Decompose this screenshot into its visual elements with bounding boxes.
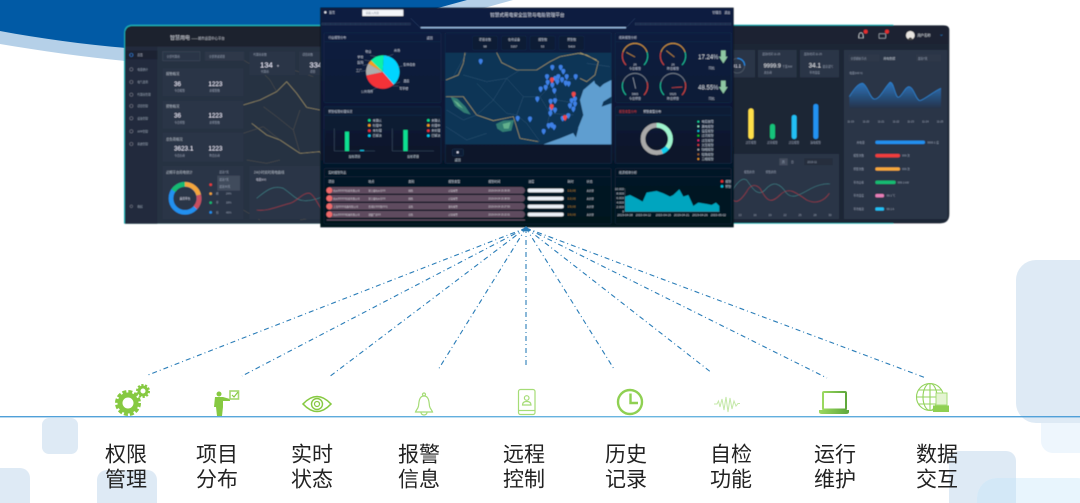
table header: 耗时: [568, 178, 574, 183]
table rows: 未处理: [587, 196, 594, 200]
left alarm overview cards: 总报警数: [209, 89, 220, 93]
map stat boxes: [472, 36, 584, 50]
label: 项目分布: 分布: [196, 468, 238, 492]
gauge 1: [622, 43, 648, 71]
percent down indicators: 48.55%: [698, 85, 719, 91]
left donut panel: 最近7天: [219, 178, 229, 182]
gauge 4: 昨日预警: [667, 95, 679, 100]
right side metrics panel: 99.1 ℃: [887, 194, 896, 198]
panel: alarm type donut: 报警类型分布: [619, 108, 637, 113]
panel: alarm type donut: [615, 107, 731, 163]
panel: industry alarm pie: 行业报警分布: [328, 35, 346, 40]
table header: [328, 178, 593, 183]
right top stat cards: 平均温度: [809, 70, 820, 74]
table rows: 杭州XXXXX科技有限公司: [333, 188, 360, 192]
donut legend: 电弧故障: [702, 119, 714, 124]
left donut panel: 最近7天: [219, 170, 229, 174]
left donut panel: 谷: [216, 210, 219, 214]
panel: alarm trend area chart: 能源规律分析: [619, 169, 637, 174]
table header: 报警类型: [448, 178, 460, 183]
left alarm overview cards: 报警概况: [166, 71, 180, 76]
map stat boxes: 项目总数: [479, 37, 491, 42]
left donut panel: 24%: [226, 192, 232, 196]
right bar chart: 过压报警: [746, 141, 757, 145]
left donut panel: 运营平台: [180, 196, 191, 200]
right top stat cards: 41.1: [733, 63, 742, 68]
panel: alarm trend area chart: 预警: [725, 183, 731, 188]
dashed connector lines: [148, 226, 926, 378]
panel: alarm trend area chart: 8,000: [617, 192, 624, 196]
left alarm overview cards: 3623.1: [174, 146, 194, 153]
table header: 状态: [587, 178, 593, 183]
right side metrics panel: 平均温度: [853, 194, 864, 198]
right side metrics panel: 999.1 kW: [898, 180, 909, 184]
right line chart panel: 周: [782, 160, 785, 164]
panel: alarm trend area chart: 2019-05-02: [711, 213, 726, 217]
panel: warning handling bars: 未确认: [373, 117, 382, 122]
map back button: 返回: [455, 157, 461, 162]
pie chart: [356, 47, 415, 94]
table rows: 诸暨厂房XX: [368, 212, 381, 216]
gauge 4: [660, 73, 686, 100]
label: 历史记录: 记录: [605, 468, 647, 492]
main header bar: 退出: [724, 10, 730, 15]
right side metrics panel: 11-23: [907, 120, 914, 124]
panel: alarm trend area chart: 4,000: [617, 201, 624, 205]
icon: sound wave: [714, 397, 740, 412]
table rows: 2019-04-04 15:39:05: [488, 190, 511, 192]
right side metrics panel: 999 次: [902, 154, 910, 158]
left sidebar: 电气监测: [137, 80, 148, 84]
gauge 2: 昨日报警: [667, 66, 679, 71]
right line chart panel: 22: [784, 213, 787, 217]
right line chart panel: 13: [739, 213, 742, 217]
left donut panel: 46%: [226, 210, 232, 214]
gauge 4: 9525: [670, 92, 677, 96]
left dropdown filters: 全部代理商: [167, 54, 180, 58]
label: 权限管理: 权限: [105, 444, 147, 466]
left donut panel: 峰: [216, 192, 219, 196]
panel: alarm trend area chart: [615, 168, 731, 224]
panel: alarm type donut: 预警类型分布: [643, 108, 661, 113]
left donut panel: 最近30天: [219, 185, 231, 189]
right side metrics panel: 用电量: [857, 140, 865, 144]
left stat cards top: 334: [309, 60, 323, 69]
panel: alarm trend area chart: 2019-04-16: [656, 213, 671, 217]
left sidebar: 收起: [137, 204, 143, 208]
baseline: [0, 416, 1080, 417]
icon: eye: [303, 396, 331, 412]
right bar chart: [746, 104, 821, 145]
panel: alarm trend area chart: 2019-04-26: [692, 213, 708, 217]
left alarm overview cards: 今日预警: [174, 121, 185, 125]
label: 远程控制: 控制: [503, 468, 545, 492]
panel: alarm trend area chart: 6,000: [617, 196, 624, 200]
right line chart panel: [727, 154, 839, 219]
table header: 进度: [528, 178, 534, 183]
map stat boxes: 报警数: [538, 37, 547, 42]
left sidebar: 项目管理: [137, 104, 148, 108]
left donut panel: 18%: [226, 201, 232, 205]
right line chart panel: 25: [799, 213, 802, 217]
right side metrics panel: 11-24: [922, 120, 929, 124]
left stat cards top: 项目: [310, 70, 316, 74]
right dashboard header: 用户名称: [917, 33, 931, 38]
left dashboard header: [125, 26, 333, 47]
gauge 3: 今日预警: [629, 95, 641, 100]
left dashboard map lines: [243, 53, 325, 220]
panel: alarm trend area chart: 报警: [725, 178, 731, 183]
right side metrics panel: 平均功率: [853, 180, 864, 184]
panel: warning handling bars: 未处理: [373, 128, 382, 133]
panel: alarm trend area chart: 2019-04-08: [617, 213, 633, 217]
left line chart panel: [249, 166, 329, 219]
table header: 地点: [368, 178, 374, 183]
label: 历史记录: 历史: [605, 444, 647, 466]
right side metrics panel: 预警次数: [853, 167, 864, 171]
panel: gauges: 能耗报警分析: [619, 34, 637, 39]
panel: alarm trend area chart: 2,000: [617, 205, 624, 209]
right side metrics panel: 99.1 A: [887, 207, 894, 211]
left sidebar: 首页: [137, 53, 143, 57]
right top stat cards: 千瓦/kW: [782, 65, 793, 69]
left alarm overview cards: 昨日负荷: [209, 154, 220, 158]
donut legend: 短路报警: [702, 151, 714, 156]
left line chart panel: 24小时实时用电曲线: [254, 169, 285, 174]
left alarm overview cards: 1223: [208, 81, 223, 88]
panel: warning handling bars: 当前项目: [348, 154, 360, 159]
table rows: 2019-04-04 15:38:53: [488, 198, 511, 200]
right top stat cards: 34.1: [809, 63, 821, 70]
table rows: 青浦区XXX路XX号: [368, 204, 388, 208]
right bar chart: 漏电报警: [810, 141, 821, 145]
right top stat cards: 9999.9: [764, 64, 781, 70]
pie chart: 学校: [357, 54, 363, 59]
left alarm overview cards: 1223: [208, 113, 223, 120]
label: 权限管理: 管理: [105, 468, 147, 492]
gauge 3: 3865: [632, 92, 639, 96]
left alarm overview cards: 预警概况: [166, 104, 180, 109]
left stat cards top: [249, 52, 329, 75]
panel: realtime alarm table: [324, 168, 611, 224]
percent down indicators: 同比: [709, 95, 715, 100]
table header: 项目: [328, 179, 334, 183]
right line chart panel: 报警趋势: [744, 170, 755, 174]
table rows: 过流报警: [448, 212, 458, 216]
right bar chart: 过温报警: [789, 141, 800, 145]
panel: warning handling bars: 当前项目: [407, 154, 419, 159]
right top stat cards: [727, 50, 839, 77]
left alarm overview cards: 36: [174, 113, 182, 120]
label: 报警信息: 信息: [398, 468, 440, 492]
table rows: 1.2小时: [568, 196, 576, 200]
gauge 3: [622, 73, 648, 100]
gauge 2: [660, 43, 686, 71]
left stat cards top: +: [277, 63, 280, 68]
panel: alarm trend area chart: 0: [622, 210, 624, 214]
left dropdown filters: [163, 52, 244, 61]
pie chart: 医院: [357, 59, 363, 64]
right top stat cards: 总负荷: [764, 70, 772, 74]
left dashboard header: ——城市运营中心平台: [191, 35, 225, 40]
panel: warning handling bars: [324, 107, 441, 163]
donut legend: 漏电报警: [702, 123, 714, 128]
map back button: [452, 149, 463, 162]
pie chart: 公共场所: [361, 89, 373, 94]
map pins: [479, 59, 578, 135]
right side metrics panel: 9999.1 度: [927, 140, 939, 144]
left alarm overview cards: 总负荷概况: [166, 137, 183, 142]
left donut panel: 近期平台用电统计: [166, 169, 193, 174]
table rows: 总路: [408, 212, 414, 216]
left alarm overview cards: 今日报警: [174, 89, 185, 93]
left dropdown filters: 全部测试项目: [209, 54, 225, 58]
label: 项目分布: 项目: [196, 444, 238, 466]
table rows: 1.5小时: [568, 204, 576, 208]
panel: alarm trend area chart: 2019-04-21: [674, 213, 690, 217]
table rows: 浙江省杭州市XX: [368, 188, 386, 192]
left alarm overview cards: 36: [174, 81, 182, 88]
table rows: [326, 187, 594, 221]
table rows: 2019-04-04 15:22:01: [488, 214, 511, 216]
right line chart panel: 2019-11: [807, 160, 817, 164]
right top stat cards: 最新时间 11-25: [762, 52, 781, 56]
pie chart: 酒店: [403, 78, 409, 83]
icon: clock: [618, 390, 642, 414]
right side metrics panel: 电量(kW·h): [849, 71, 863, 75]
table rows: 杭州XXXXX机械有限公司: [333, 212, 360, 216]
donut legend: 欠压报警: [702, 142, 714, 147]
label: 远程控制: 远程: [503, 444, 545, 466]
pie chart: 物业: [365, 49, 371, 54]
panel: industry alarm pie: [324, 33, 441, 103]
right side metrics panel: 11-20: [863, 120, 870, 124]
right side metrics panel: [844, 50, 947, 219]
table rows: 1.6小时: [568, 212, 576, 216]
label: 运行维护: 运行: [814, 444, 856, 466]
right line chart panel: 预警趋势: [766, 170, 777, 174]
panel: map: [445, 33, 611, 163]
percent down indicators: [698, 50, 728, 100]
pie chart: 工厂: [356, 68, 362, 72]
table rows: 杭州XXXXX科技有限公司: [333, 196, 360, 200]
icon: person with checklist: [214, 391, 238, 416]
table rows: 未处理: [587, 212, 594, 216]
table rows: 上海XXXX电器有限公司: [333, 204, 359, 208]
right line chart panel: 16: [754, 213, 757, 217]
main header bar: 智慧式用电安全监管与电能管理平台: [490, 11, 565, 18]
label: 自检功能: 功能: [710, 468, 752, 492]
right side metrics panel: 11-25: [937, 120, 944, 124]
map: [445, 53, 611, 144]
left stat cards top: 134: [260, 60, 274, 69]
label: 数据交互: 数据: [916, 444, 958, 466]
right side metrics panel: 999 次: [902, 167, 910, 171]
right side metrics panel: 用电数据: [883, 55, 895, 60]
table rows: 漏电报警: [448, 204, 458, 208]
table rows: 浙江省杭州市XX: [368, 196, 386, 200]
table rows: 未处理: [587, 204, 594, 208]
right side metrics panel: 最近7天: [918, 56, 928, 60]
right line chart panel: 28: [814, 213, 817, 217]
left stat cards top: 代理商总数: [253, 53, 267, 57]
right line chart panel: 日: [791, 161, 794, 164]
icon: gears: [116, 385, 149, 414]
donut legend: 缺相报警: [702, 147, 714, 152]
icon: mobile phone user: [518, 390, 535, 414]
percent down indicators: 17.24%: [698, 55, 719, 61]
table rows: 1.1小时: [568, 188, 576, 192]
left stat cards top: 代理商: [261, 70, 269, 74]
panel: gauges: [615, 33, 731, 103]
donut legend: 过流报警: [702, 133, 714, 138]
panel: warning handling bars: 处理中: [373, 122, 382, 127]
table header: 报警时间: [488, 178, 500, 183]
gauge 2: 26: [671, 62, 675, 66]
main header bar: 请输入内容: [366, 11, 379, 15]
left alarm overview cards: 1223: [208, 146, 223, 153]
right top stat cards: 最高温℃: [823, 65, 834, 69]
donut legend: 三相报警: [702, 156, 714, 161]
right dashboard screenshot: [727, 25, 949, 224]
panel: warning handling bars: 已解决: [431, 133, 440, 138]
left line chart panel: 电量(kV): [256, 178, 266, 182]
label: 报警信息: 报警: [398, 444, 440, 466]
right line chart panel: 19: [769, 213, 772, 217]
map stat boxes: 5400: [568, 44, 575, 48]
panel: warning handling bars: 已解决: [373, 133, 382, 138]
map stat boxes: 53: [541, 44, 545, 48]
right bar chart: 过流报警: [767, 141, 778, 145]
donut legend: [697, 119, 714, 161]
left alarm overview cards: [163, 68, 243, 162]
table rows: 过温报警: [448, 188, 458, 192]
table rows: 过温报警: [448, 196, 458, 200]
panel: realtime alarm table: 实时报警列表: [328, 170, 346, 175]
right side metrics panel: 11-22: [893, 120, 900, 124]
table header: 类别: [408, 178, 414, 183]
panel: industry alarm pie: 返回: [427, 35, 433, 40]
panel: alarm trend area chart: 10,000: [615, 187, 624, 191]
left sidebar: [125, 47, 157, 224]
left sidebar: 电量统计: [137, 67, 148, 71]
main dashboard screenshot: [321, 8, 733, 227]
table rows: 线路: [408, 188, 414, 192]
left sidebar: 系统管理: [137, 142, 148, 146]
donut legend: 过压报警: [702, 137, 714, 142]
pie chart: 集体宿舍: [403, 61, 415, 66]
label: 实时状态: 实时: [291, 444, 333, 466]
main header bar: 管理员: [712, 10, 721, 15]
main header bar: 首页: [329, 9, 335, 14]
panel: warning handling bars: 未处理: [431, 128, 440, 133]
panel: alarm trend area chart: 2019-04-12: [636, 213, 651, 217]
right line chart panel: 30: [829, 213, 832, 217]
left alarm overview cards: 总预警数: [209, 121, 220, 125]
left dashboard header: 智慧用电: [170, 34, 190, 41]
left donut panel: [163, 166, 243, 219]
left dashboard screenshot: [124, 25, 333, 224]
table rows: 未处理: [587, 188, 594, 192]
right side metrics panel: 全部组织节点: [851, 56, 867, 60]
right side metrics panel: 平均电流: [853, 207, 864, 211]
table rows: 2019-04-04 15:27:53: [488, 206, 511, 208]
label: 运行维护: 维护: [814, 468, 856, 492]
left donut panel: 平: [216, 202, 219, 205]
donut legend: 温度报警: [702, 128, 714, 133]
map stat boxes: 在线设备: [508, 37, 520, 42]
table rows: 线路: [408, 196, 414, 200]
panel: warning handling bars: 未确认: [431, 117, 440, 122]
left sidebar: APP管理: [137, 129, 148, 133]
left alarm overview cards: 今日负荷: [174, 154, 185, 158]
percent down indicators: 同比: [709, 65, 715, 70]
right side metrics panel: 11-19: [847, 120, 854, 124]
icon: globe with laptop: [916, 384, 949, 412]
left sidebar: 设备管理: [137, 116, 148, 120]
right side metrics panel: 报警次数: [853, 154, 864, 158]
pie chart: 写字楼: [399, 85, 408, 90]
panel: warning handling bars: 处理中: [431, 122, 440, 127]
map stat boxes: 预警数: [567, 37, 576, 42]
map stat boxes: 3157: [511, 44, 518, 48]
top blue swoosh: [0, 0, 513, 66]
left sidebar: 代理商管理: [137, 93, 151, 97]
label: 数据交互: 交互: [916, 468, 958, 492]
background decorative rounded squares: [0, 260, 1080, 503]
table rows: 支路: [408, 204, 414, 208]
left stat cards top: 项目总数: [302, 53, 313, 57]
label: 实时状态: 状态: [291, 468, 333, 492]
right top stat cards: 最新时间 11-25: [804, 52, 822, 56]
gauge 1: 今日报警: [629, 66, 641, 71]
right dashboard header: [727, 26, 949, 44]
map stat boxes: 98: [483, 44, 487, 48]
icon: bell: [416, 393, 432, 415]
right side metrics panel: 11-21: [878, 120, 885, 124]
gauge 1: 26: [633, 62, 637, 66]
icon: laptop: [819, 392, 849, 414]
main header bar: [322, 9, 732, 28]
panel: warning handling bars: 预警权限处理情况: [328, 108, 352, 113]
pie chart: 商场: [394, 47, 400, 52]
label: 自检功能: 自检: [710, 444, 752, 466]
